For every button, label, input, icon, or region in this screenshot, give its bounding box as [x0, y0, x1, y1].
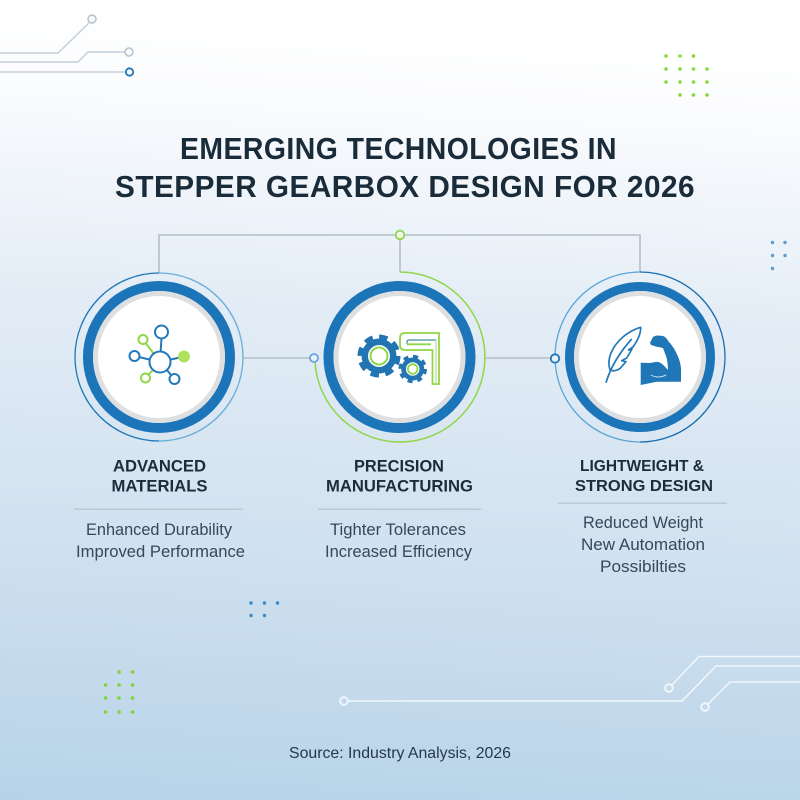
dot grid: bottom left [104, 670, 134, 714]
icon: flexed arm [641, 336, 681, 385]
node: lightweight and strong design [555, 272, 725, 442]
ring: materials [88, 286, 230, 428]
title: STEPPER GEARBOX DESIGN FOR 2026 [115, 169, 695, 204]
outer arc: design [555, 272, 725, 442]
node: advanced materials [75, 273, 243, 441]
ring: manufacturing [328, 286, 470, 428]
text block: precision manufacturing: MANUFACTURING [326, 478, 473, 496]
text block: advanced materials: MATERIALS [112, 478, 208, 496]
dot grid: top right [664, 54, 709, 97]
text block: lightweight and strong design: Reduced Weight [583, 513, 703, 532]
source note: Source: Industry Analysis, 2026 [289, 745, 511, 762]
icon: molecule network [130, 326, 190, 384]
node: precision manufacturing [315, 272, 485, 442]
connector node: left blue [310, 354, 318, 362]
title: EMERGING TECHNOLOGIES IN [180, 131, 617, 166]
outer arc: materials [75, 273, 243, 441]
text block: advanced materials: Improved Performance [76, 542, 245, 561]
text block: precision manufacturing: Tighter Tolerances [330, 520, 466, 539]
connector node: right blue [551, 354, 559, 363]
text block: advanced materials: ADVANCED [113, 458, 206, 476]
icon: feather [606, 327, 641, 383]
circuit traces: top left [0, 15, 133, 76]
ring: design [570, 286, 710, 428]
circuit traces: bottom right [340, 656, 800, 711]
text block: advanced materials [74, 458, 245, 561]
text block: lightweight and strong design: STRONG DESIGN [575, 478, 713, 495]
outer arc: manufacturing [315, 272, 485, 442]
connector lines [159, 235, 640, 358]
icon: gears and bracket [360, 333, 439, 384]
text block: lightweight and strong design: New Automation [581, 535, 705, 554]
text block: lightweight and strong design [558, 458, 727, 576]
dot grid: right [771, 241, 787, 270]
connector node: top green [396, 231, 404, 239]
text block: precision manufacturing [318, 458, 481, 561]
text block: precision manufacturing: PRECISION [354, 458, 444, 476]
text block: lightweight and strong design: Possibilties [600, 557, 686, 576]
text block: lightweight and strong design: LIGHTWEIGHT & [580, 458, 704, 475]
title [115, 131, 695, 204]
text block: precision manufacturing: Increased Efficiency [325, 542, 472, 561]
dot grid: centre blue [249, 601, 279, 617]
text block: advanced materials: Enhanced Durability [86, 520, 232, 539]
